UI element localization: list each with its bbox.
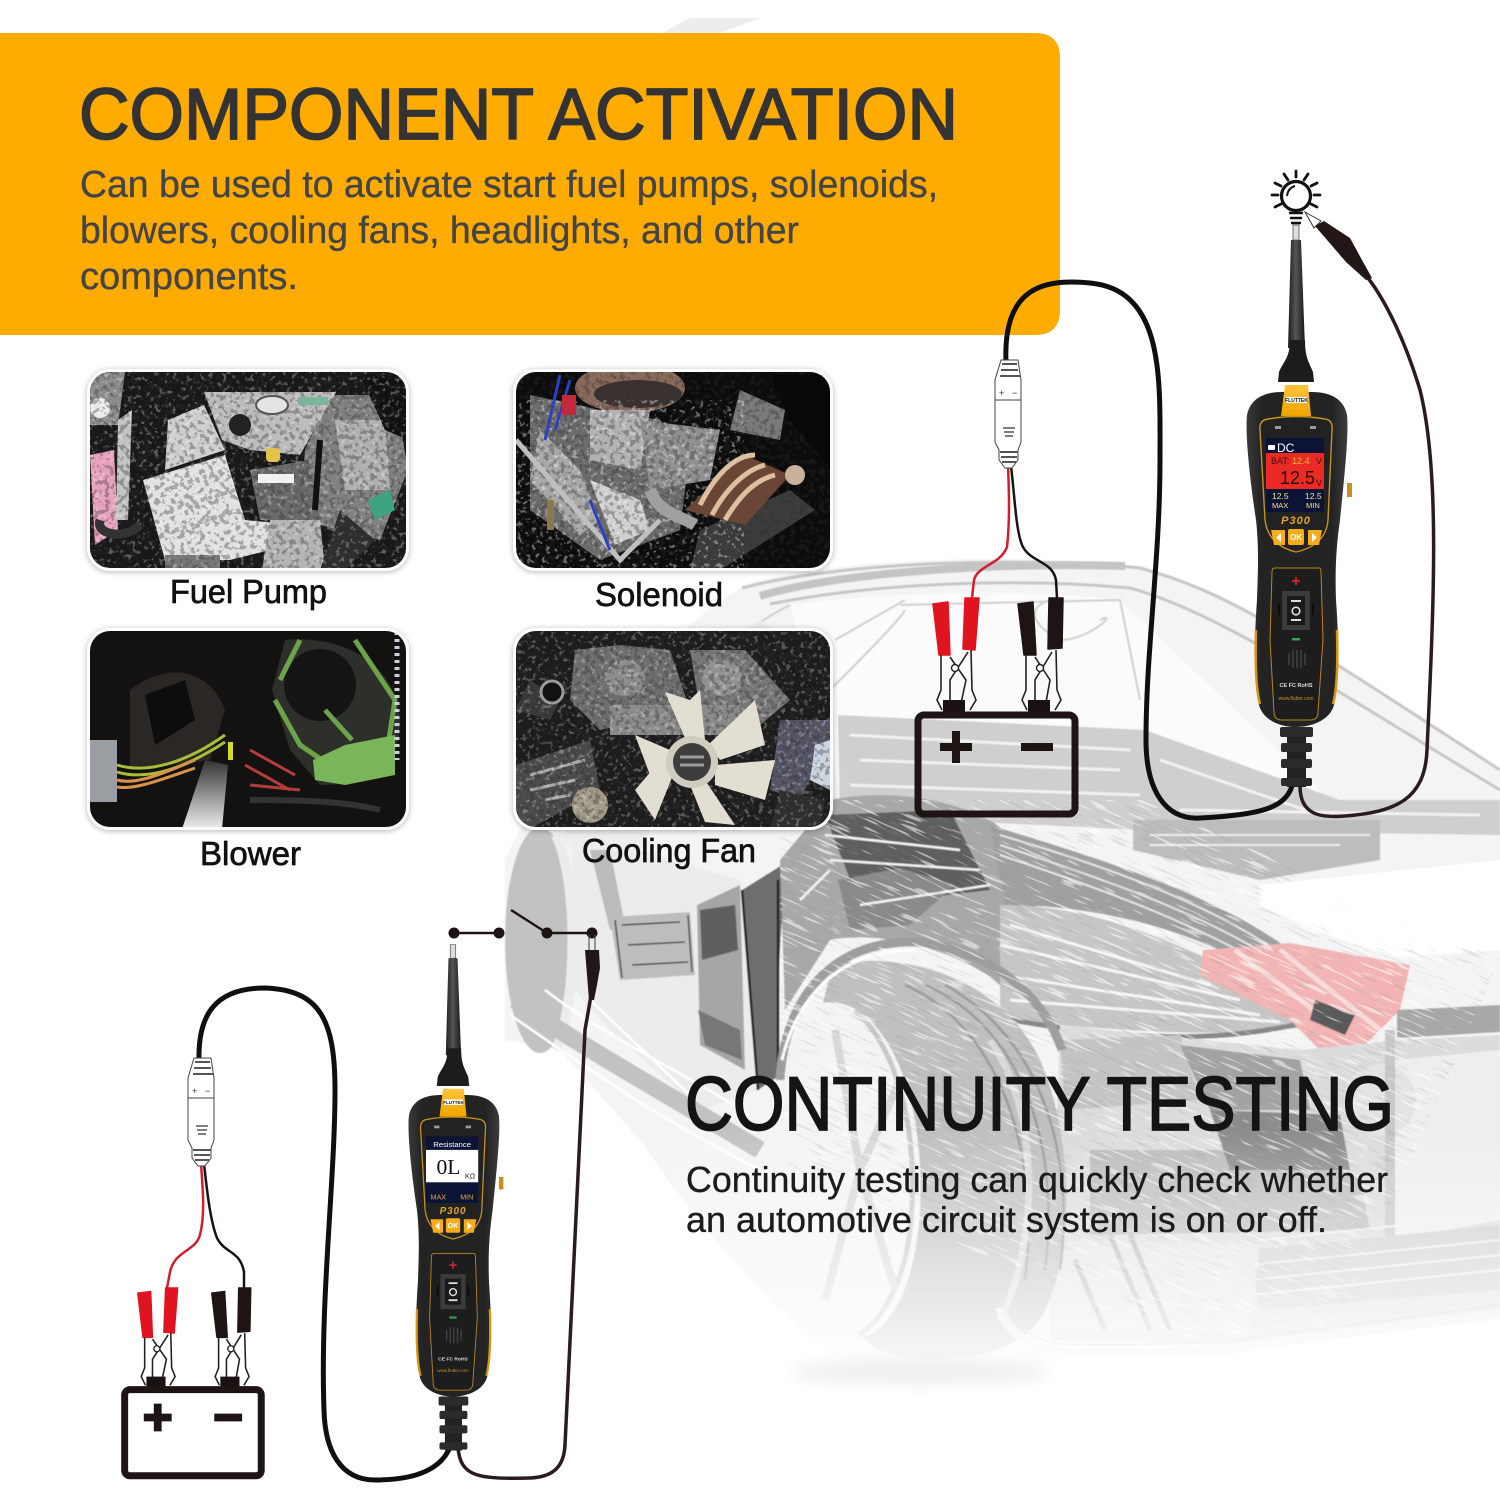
label: solenoid: Solenoid — [595, 576, 723, 613]
banner body text: Can be used to activate start fuel pumps, solenoids, — [80, 164, 938, 206]
banner body text: components. — [80, 256, 298, 298]
tester: top (DC voltage reading): 12.5 — [1280, 468, 1315, 488]
buttons — [1271, 530, 1285, 545]
wiring: bottom thick cable — [199, 988, 450, 1480]
background car illustration — [500, 559, 1500, 1398]
continuity testing body text — [686, 1159, 1388, 1240]
wiring: bottom thin cable — [458, 990, 592, 1478]
tester: top (DC voltage reading): 12.5 — [1272, 491, 1289, 501]
wiring: top red wire — [972, 466, 1009, 598]
tester: bottom (resistance reading): FLUTTEK — [443, 1100, 464, 1105]
strain relief — [445, 1396, 462, 1450]
windshield highlight — [790, 593, 1330, 800]
screen bezel — [421, 1117, 486, 1239]
banner body text: blowers, cooling fans, headlights, and other — [80, 210, 799, 252]
heading: continuity testing: CONTINUITY TESTING — [685, 1062, 1394, 1147]
wiring: bottom black wire — [204, 1164, 244, 1288]
tester: top (DC voltage reading): 12.4 — [1292, 456, 1310, 466]
side button — [1347, 483, 1352, 497]
sill — [515, 1000, 760, 1150]
bottom clamps and battery — [125, 1288, 261, 1476]
tester: bottom (resistance reading): MAX — [431, 1192, 446, 1201]
fender — [780, 795, 1040, 1010]
bumper lip — [1000, 1307, 1500, 1353]
headlight cluster — [1000, 905, 1320, 1033]
front rim — [802, 1002, 921, 1335]
rocker switch — [440, 1274, 466, 1309]
dashboard band — [838, 715, 1500, 835]
orange banner — [0, 33, 1060, 335]
continuity testing body text: Continuity testing can quickly check whether — [686, 1159, 1388, 1200]
screen — [1266, 438, 1324, 512]
tester: top (DC voltage reading): DC — [1277, 441, 1295, 455]
banner body text — [80, 164, 938, 298]
tester: bottom (resistance reading): KΩ — [465, 1172, 476, 1181]
tester: bottom (resistance reading): Resistance — [433, 1140, 471, 1149]
screen — [426, 1136, 478, 1203]
bottom test lead clip — [585, 935, 600, 1000]
probe — [1293, 225, 1299, 240]
hood white highlight overlay — [1262, 868, 1500, 950]
photo: cooling fan — [513, 628, 833, 830]
wiring: top thick cable — [1006, 282, 1292, 818]
upper engine bay — [1133, 820, 1380, 880]
wiring: bottom red wire — [167, 1164, 203, 1288]
model name: P300 — [440, 1206, 466, 1217]
radiator bar — [1397, 1005, 1500, 1038]
side button — [499, 1177, 503, 1190]
certification marks: CE FC RoHS — [1280, 683, 1313, 689]
yellow tab — [1281, 385, 1311, 416]
rear wheel — [505, 827, 575, 1053]
roof band — [760, 565, 1125, 596]
photo: solenoid — [513, 363, 833, 571]
tester: top (DC voltage reading): BAT: — [1271, 456, 1289, 466]
top inline connector — [995, 360, 1021, 468]
strain relief — [1287, 727, 1306, 787]
car silhouette — [505, 559, 1500, 1371]
wiring: top thin cable — [1300, 278, 1434, 816]
banner heading: COMPONENT ACTIVATION — [79, 75, 958, 155]
bottom battery icon — [125, 1390, 261, 1476]
speaker grille — [447, 1327, 461, 1343]
tester: top (DC voltage reading): OK — [1290, 533, 1302, 542]
front grille and bumper — [1050, 1025, 1500, 1345]
yellow tab — [440, 1089, 467, 1117]
tester: top (DC voltage reading): 12.5 — [1305, 491, 1322, 501]
switch symbol — [448, 910, 598, 938]
lower panel — [430, 1253, 477, 1390]
tester: top (DC voltage reading): MIN — [1306, 501, 1320, 510]
top clamp: black — [1018, 598, 1063, 713]
buttons — [431, 1219, 443, 1233]
top test lead clip — [1305, 212, 1372, 280]
bottom inline connector — [188, 1058, 214, 1166]
fan blades — [635, 690, 775, 825]
tester: top (DC voltage reading): www.flutter.com — [1278, 696, 1314, 702]
tester: top (DC voltage reading): MAX — [1272, 501, 1288, 510]
tester: bottom (resistance reading): 0L — [436, 1155, 460, 1179]
tester: top (DC voltage reading) — [1247, 225, 1352, 787]
rocker switch — [1282, 591, 1310, 630]
top battery icon — [918, 715, 1075, 814]
tester: top (DC voltage reading): V — [1316, 478, 1322, 488]
grey diagonal above banner — [662, 18, 760, 33]
probe — [450, 945, 456, 958]
tester: top (DC voltage reading): V — [1316, 456, 1322, 466]
ground fade — [500, 1130, 1500, 1380]
body — [1247, 392, 1347, 727]
top clamp: red — [933, 598, 979, 713]
speaker grille — [1289, 650, 1305, 668]
front tire — [808, 961, 1066, 1360]
bottom clamp: black — [212, 1288, 251, 1388]
top inline connector: + — [999, 388, 1004, 398]
hood white highlight — [1260, 860, 1500, 957]
continuity testing body text: an automotive circuit system is on or off. — [686, 1199, 1327, 1240]
wiring: top black wire — [1011, 466, 1057, 598]
tester: bottom (resistance reading): OK — [448, 1221, 459, 1230]
cabin glass — [560, 620, 790, 850]
screen bezel — [1260, 416, 1332, 552]
a-pillar — [742, 860, 790, 1090]
label: blower: Blower — [200, 835, 301, 872]
car fine line texture — [780, 800, 1500, 1311]
tester: bottom (resistance reading): www.flutter.com — [437, 1368, 469, 1373]
tester: bottom (resistance reading): MIN — [460, 1192, 473, 1201]
bottom clamp: red — [138, 1288, 178, 1388]
label: fuel pump: Fuel Pump — [170, 573, 327, 610]
bulb icon — [1272, 171, 1320, 223]
body — [408, 1095, 499, 1396]
door and rear window — [572, 850, 760, 1110]
bottom inline connector: + — [192, 1086, 197, 1096]
hood band — [990, 825, 1330, 990]
red headlight — [1200, 943, 1410, 1070]
tester: bottom (resistance reading) — [408, 945, 503, 1450]
photo: fuel pump — [87, 369, 409, 571]
certification marks: CE FC RoHS — [438, 1357, 469, 1363]
top inline connector: − — [1012, 388, 1017, 398]
label: cooling fan: Cooling Fan — [582, 832, 756, 869]
model name: P300 — [1281, 515, 1311, 527]
bottom inline connector: − — [205, 1086, 210, 1096]
tester: top (DC voltage reading): FLUTTEK — [1285, 398, 1308, 404]
photo: blower — [87, 628, 409, 830]
wheel arch — [780, 942, 1062, 1080]
lower panel — [1270, 568, 1323, 720]
